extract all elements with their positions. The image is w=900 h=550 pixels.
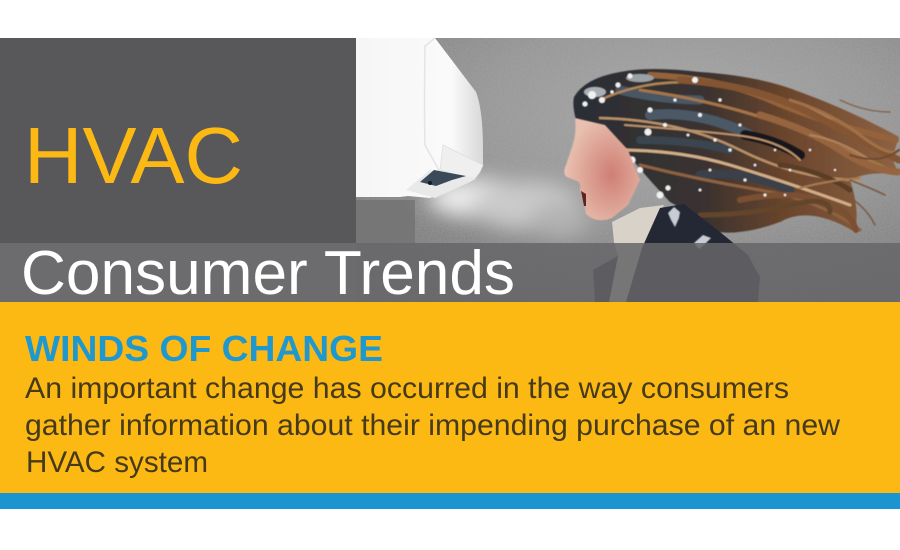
cold air mist (428, 179, 590, 238)
body text (25, 372, 841, 479)
body text: HVAC system (26, 446, 208, 479)
woman: neck and shirt collar (609, 205, 664, 302)
photo: woman blasted by air conditioner (356, 38, 900, 302)
woman: face (564, 118, 640, 220)
snow in hair (582, 74, 836, 198)
icon: air conditioner unit (356, 38, 483, 198)
woman: jacket (593, 204, 760, 302)
woman: hair (573, 69, 899, 233)
heading: Consumer Trends: Consumer Trends (21, 239, 515, 308)
panel: yellow intro (0, 302, 900, 493)
heading: HVAC: HVAC (24, 111, 243, 200)
band underlay (0, 243, 356, 302)
hair strands (600, 75, 899, 230)
blue footer bar (0, 493, 900, 509)
snow on jacket (668, 207, 711, 249)
subheading: WINDS OF CHANGE (25, 328, 383, 369)
wall background (356, 38, 900, 302)
panel: grey title block (0, 38, 356, 244)
translucent band (0, 243, 900, 302)
body text: An important change has occurred in the way consumers (25, 372, 789, 405)
woman: open mouth (581, 191, 586, 206)
body text: gather information about their impending purchase of an new (25, 409, 841, 442)
